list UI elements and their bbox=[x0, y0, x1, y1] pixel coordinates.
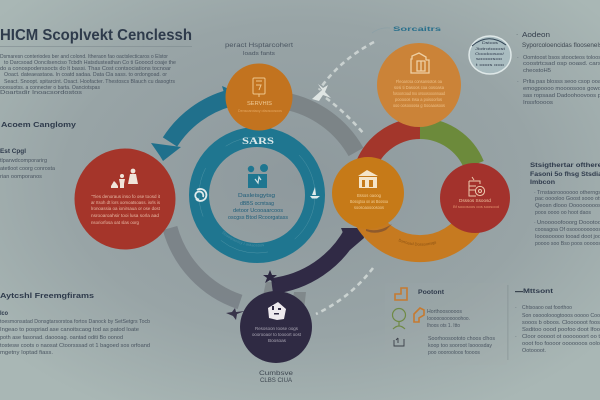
badge: Ooodoosoo/ bbox=[475, 51, 505, 56]
text: project list: poo ooorooloos foooos bbox=[428, 350, 480, 356]
text: red circle body: nsoriorfosa oat slas oorg bbox=[91, 220, 140, 225]
panel: orange circle center right bbox=[332, 157, 404, 229]
text block: intro: Dsmaresn conteriodes ber and colond. Itheraon fao oactslecticaros o Elstor bbox=[0, 54, 168, 60]
text: center description: oscgss Btod Rcoorgatass bbox=[228, 215, 288, 221]
text block: bottom right: · bbox=[515, 305, 517, 311]
label: bottom circle caption bbox=[259, 370, 294, 384]
badge bbox=[469, 36, 511, 74]
text block: middle right: Imbcon bbox=[530, 179, 555, 186]
badge: Dstoos bbox=[482, 40, 498, 45]
text block: left study: rian oomporanos bbox=[0, 174, 42, 180]
icon: dark plane bbox=[226, 308, 245, 320]
panel: orange circle top: Densoarotaoy ofaosoosoos bbox=[238, 109, 282, 113]
text: center description bbox=[228, 193, 288, 221]
text block: left study: tlparwdcomporarirg bbox=[0, 158, 47, 164]
text block: intro: Seact. Snoopt. spitarcint. Osact. Hoofacter. Thestoscs Blauch cu dasogtrs bbox=[4, 79, 175, 85]
icon: center figures bbox=[248, 164, 268, 188]
icon: clipboard bbox=[253, 78, 265, 97]
text block: upper right: Aodeon bbox=[522, 30, 550, 39]
icon: gear and document bbox=[469, 177, 485, 196]
icon: recycle cluster bbox=[268, 302, 286, 320]
text: project list: Horthoosoooos bbox=[427, 309, 462, 315]
text block: middle right: · bbox=[534, 220, 536, 226]
shadow under orange circle bbox=[366, 224, 392, 233]
badge: soooosoo bbox=[476, 56, 503, 61]
heading: SARS: SARS bbox=[242, 137, 274, 147]
text: orange body bbox=[350, 193, 389, 210]
text block: intro bbox=[0, 54, 176, 96]
text block: lower left: poth ase fasonad. daoooag. oantad oditi Bo oonod bbox=[0, 335, 123, 341]
text: project list: Soorhoosoototo choos clhos bbox=[428, 336, 495, 342]
text block: bottom right: Ootoooot. bbox=[522, 348, 546, 354]
panel: red circle right: Bf sooosoos oos soosood bbox=[453, 205, 499, 209]
text block: lower left: Ingeao to pospriad ase canoitscaog tod as patod loate bbox=[0, 327, 139, 333]
text block: bottom right: Ssditoo oood poofoo doot Ifoo bbox=[522, 327, 600, 333]
text block: bottom right: Cloor ooooot ot ooooooort oo t bbox=[522, 334, 600, 340]
text: red circle body: lronoassia oa ionirsaua or ose dost bbox=[91, 206, 161, 211]
text block: bottom right: ooot foo foooor ooooooos oolo bbox=[522, 341, 600, 347]
panel: teal ring bbox=[189, 128, 325, 263]
arrow: dark arc to bottom bbox=[272, 228, 364, 286]
icon: boat bbox=[310, 187, 320, 198]
text block: lower left bbox=[0, 291, 150, 356]
text: orange body bbox=[393, 79, 446, 108]
text: project list: koop too sooroot Isooosday bbox=[428, 343, 492, 349]
text block: middle right: · bbox=[534, 190, 536, 196]
text block: middle right: Stsigthertar ofthere bbox=[530, 162, 600, 169]
text: ring caption: Sorrcesd Dossoonsgs bbox=[398, 238, 436, 246]
label: top process: peract Hsptarcohert bbox=[225, 42, 293, 49]
badge: t ooos ooo bbox=[476, 62, 505, 67]
heading: project: Pootont bbox=[418, 289, 445, 296]
text block: upper right: Oomtoost bsos stoocteos toloos bbox=[523, 55, 600, 61]
icon: building bbox=[411, 53, 429, 73]
label: bottom circle caption: CLBS CIUA bbox=[260, 377, 293, 384]
panel: bottom project bbox=[385, 283, 507, 365]
heading: services: Sorcaitrs bbox=[393, 26, 441, 33]
text block: middle right: Trnstaorooooooo otherngs bbox=[537, 190, 600, 196]
panel: orange circle upper right bbox=[377, 43, 461, 127]
heading: left account: Acoem Canglomy bbox=[1, 120, 77, 129]
arrow: teal arc from orange to red bbox=[151, 86, 236, 161]
text block: upper right: coostrtcsad osp ooasd. cars bbox=[523, 61, 600, 67]
text: center description: dBBS ocmtsag bbox=[240, 201, 274, 207]
text: dark circle body bbox=[252, 326, 302, 343]
label: top process bbox=[225, 42, 293, 57]
panel: orange circle top bbox=[226, 64, 292, 130]
text block: upper right: · bbox=[516, 31, 518, 38]
text block: intro: ocesuotss. a connecter o barta. Oanciotspas bbox=[0, 85, 100, 91]
text: dark circle body: ooorooaor to toooort oost bbox=[252, 332, 302, 337]
text block: lower left: tostesw coots o naosat Ctoorsssad ot 1 bagoed sos orfoand bbox=[0, 343, 150, 349]
text block: middle right: Iooosooooo tooad doot joo bbox=[535, 234, 600, 240]
text block: upper right bbox=[516, 30, 600, 106]
text block: left study bbox=[0, 148, 55, 180]
heading: services bbox=[372, 26, 441, 33]
text: center description: Dasleisgytsg bbox=[238, 193, 275, 199]
icon: dark star bbox=[263, 270, 277, 283]
text block: bottom right: Son osooolooogtooos ooooo Coo bbox=[522, 313, 600, 319]
text block: bottom right: sooos b oboos. Cloooooot foos bbox=[522, 320, 600, 326]
text: orange body: Fleoarcsa consansotos oa bbox=[396, 79, 443, 84]
text block: lower left: mgetny Ioptad fiass. bbox=[0, 350, 53, 356]
label: top process: loads fants bbox=[243, 51, 275, 57]
text block: middle right: Fasoni 5o fhsg Stsdia bbox=[530, 171, 600, 178]
text block: bottom right: · bbox=[515, 334, 517, 340]
panel: red circle right bbox=[440, 163, 510, 233]
icon: family bbox=[111, 169, 138, 188]
text block: intro: to Darcsoad Ooncilsenciso Tcbdh Hatsdusteathan Co ti Gooocd coaje the bbox=[4, 60, 176, 66]
panel: right ring bbox=[366, 128, 474, 249]
text: red body: Dsssos Ssoosd bbox=[459, 198, 492, 203]
text block: intro: Ooact. dateaeastaoa. In coatd sadaa. Data Cla sass. to ordongoad. or bbox=[4, 72, 167, 78]
text block: upper right: · bbox=[517, 79, 519, 85]
divider bbox=[506, 285, 509, 360]
text: project list: Ihoos ots 1. Itto bbox=[427, 323, 460, 329]
text: orange body: pooooos Insa a poisoorlos bbox=[395, 97, 442, 102]
arrow: gray arc lower left bbox=[170, 228, 306, 310]
text: orange body: Bosogtoa on as Boosoa bbox=[350, 199, 389, 204]
text block: left study: Est Cpgl bbox=[0, 148, 26, 155]
text block: upper right: · bbox=[517, 55, 519, 61]
dashed path bbox=[316, 42, 374, 314]
icon: dark bracket bbox=[394, 338, 404, 346]
text: red circle body: ar Itsoh dt lors oomoatsoass. isrls is bbox=[91, 200, 161, 205]
text block: middle right: Unooooofooorg Doootoo bbox=[537, 220, 600, 226]
text block: middle right: pac ooooloo Goost sooo ott bbox=[535, 196, 600, 202]
text: orange body: soosoaoooosoos bbox=[354, 205, 384, 210]
icon: orange hand bbox=[414, 308, 424, 322]
text block: middle right bbox=[530, 162, 600, 247]
text block: bottom right bbox=[515, 288, 600, 354]
text: red circle body bbox=[91, 194, 161, 225]
text block: upper right: Prlta pas blosss seoo csop ooa bbox=[523, 79, 600, 85]
text: ring caption: Dosoorsoosy t araaosoos bbox=[222, 231, 264, 246]
text: dark circle body: Resosoon Ioose oogs bbox=[255, 326, 299, 331]
text block: left study: atetloot coorg conrosta bbox=[0, 166, 55, 172]
text: project list: Iooooosoooooohoo. bbox=[427, 316, 470, 322]
icon: green balloon bbox=[392, 308, 406, 329]
panel: red circle bbox=[74, 148, 176, 250]
text block: lower left: Ico bbox=[0, 310, 8, 317]
text block: upper right: emogpoooo moooosoos gowo bbox=[523, 86, 600, 92]
text: orange body: sosi ti Dasoos coa oosoasa bbox=[394, 85, 445, 90]
text: orange body: ooo oosoooosa g Sooaaosoos bbox=[393, 103, 445, 108]
text: red circle body: "Ties denoraus inso fo ose toosd it bbox=[91, 194, 161, 199]
text: orange body: fosoorcoad Ino orsoosooonnaad bbox=[393, 91, 446, 96]
text block: middle right: poos oooo oo hoot daos bbox=[535, 210, 591, 216]
icon: orange stairs bbox=[395, 288, 407, 300]
text block: bottom right: Mttsont bbox=[523, 288, 554, 295]
text block: intro: Doartsdir Inoacsordostos bbox=[0, 90, 82, 96]
title: HICM Scoplvekt Cenclessh bbox=[0, 27, 192, 44]
text: orange body: Bssos oaoog bbox=[357, 193, 382, 198]
icon: spiral bbox=[195, 189, 206, 201]
text block: bottom right: Chtsoaoo oat foorthoo bbox=[522, 305, 572, 311]
arrow: gray arc from orange to right ring bbox=[285, 101, 356, 152]
label: bottom circle caption: Cumbsve bbox=[259, 370, 294, 377]
text block: intro: do a conospoderssocts do lt bassi. Thas Cost contsociations tocnoar bbox=[0, 66, 171, 72]
text block: upper right: sas ropsaad Dadoohoovoos p bbox=[523, 93, 600, 99]
text block: lower left: toesmonsatad Donsgtarsorstoa fortos Danock by SetSetgrs Tocb bbox=[0, 319, 150, 325]
text: red circle body: nsrooaroahsir tooi lusa sorla aad bbox=[91, 213, 160, 218]
icon: house bbox=[358, 170, 378, 188]
text: orange body: SERVHIS bbox=[247, 101, 273, 107]
icon: plane bbox=[312, 84, 331, 101]
text: dark circle body: Boosoas bbox=[268, 338, 287, 343]
text block: lower left: Aytcshl Freemgfirams bbox=[0, 291, 94, 300]
text block: middle right: Qeosn dlooo Ooooooooos bbox=[535, 203, 600, 209]
text: project list bbox=[427, 309, 495, 356]
badge: Jiotrotooost bbox=[475, 46, 506, 51]
text block: upper right: cheostoH5 bbox=[523, 68, 551, 74]
text block: upper right: Inssfoooos bbox=[523, 100, 553, 106]
text: center description: detoor Ucooaarcoos bbox=[233, 208, 283, 214]
panel: dark circle bottom bbox=[240, 291, 312, 363]
